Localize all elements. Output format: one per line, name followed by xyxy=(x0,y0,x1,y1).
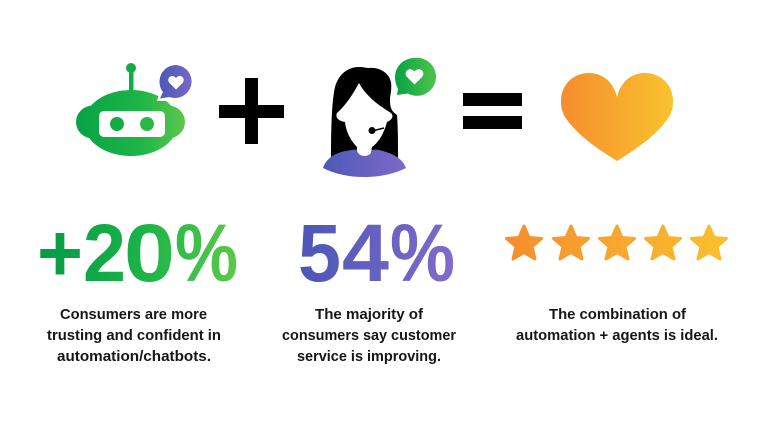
icon: robot with chat bubble xyxy=(76,62,192,156)
stat: 54%: 4 xyxy=(342,208,389,299)
text: consumers caption: automation/chatbots. xyxy=(57,349,211,365)
icon: plus sign xyxy=(219,78,284,144)
agent shoulders xyxy=(323,150,406,177)
five star rating xyxy=(506,226,726,259)
text: consumers caption xyxy=(47,307,221,365)
icon: equals sign xyxy=(463,93,522,129)
text: majority caption: consumers say customer xyxy=(282,328,456,344)
stat: 54% xyxy=(298,208,455,299)
text: majority caption: The majority of xyxy=(315,307,423,323)
stat: +20%: + xyxy=(37,208,83,299)
stat: 54%: 5 xyxy=(298,208,341,299)
agent headset microphone xyxy=(368,127,384,134)
text: combination caption: The combination of xyxy=(549,307,686,323)
robot face panel xyxy=(99,111,165,137)
icon: customer service agent with chat bubble xyxy=(323,56,439,177)
icon: orange heart xyxy=(561,73,673,161)
icon: green chat bubble with heart xyxy=(394,56,439,98)
stat: +20% xyxy=(37,208,238,299)
stat: +20%: 0 xyxy=(124,208,175,299)
text: consumers caption: Consumers are more xyxy=(60,307,207,323)
text: majority caption xyxy=(282,307,456,365)
robot head xyxy=(76,90,185,156)
icon: purple chat bubble with heart xyxy=(157,62,192,101)
agent face xyxy=(336,83,392,157)
text: combination caption xyxy=(516,307,718,344)
robot antenna xyxy=(126,63,136,92)
agent hair xyxy=(331,67,398,158)
text: consumers caption: trusting and confident in xyxy=(47,328,221,344)
stat: +20%: % xyxy=(175,208,238,299)
stat: 54%: % xyxy=(390,208,455,299)
stat: +20%: 2 xyxy=(83,208,126,299)
text: majority caption: service is improving. xyxy=(297,349,441,365)
text: combination caption: automation + agents is ideal. xyxy=(516,328,718,344)
